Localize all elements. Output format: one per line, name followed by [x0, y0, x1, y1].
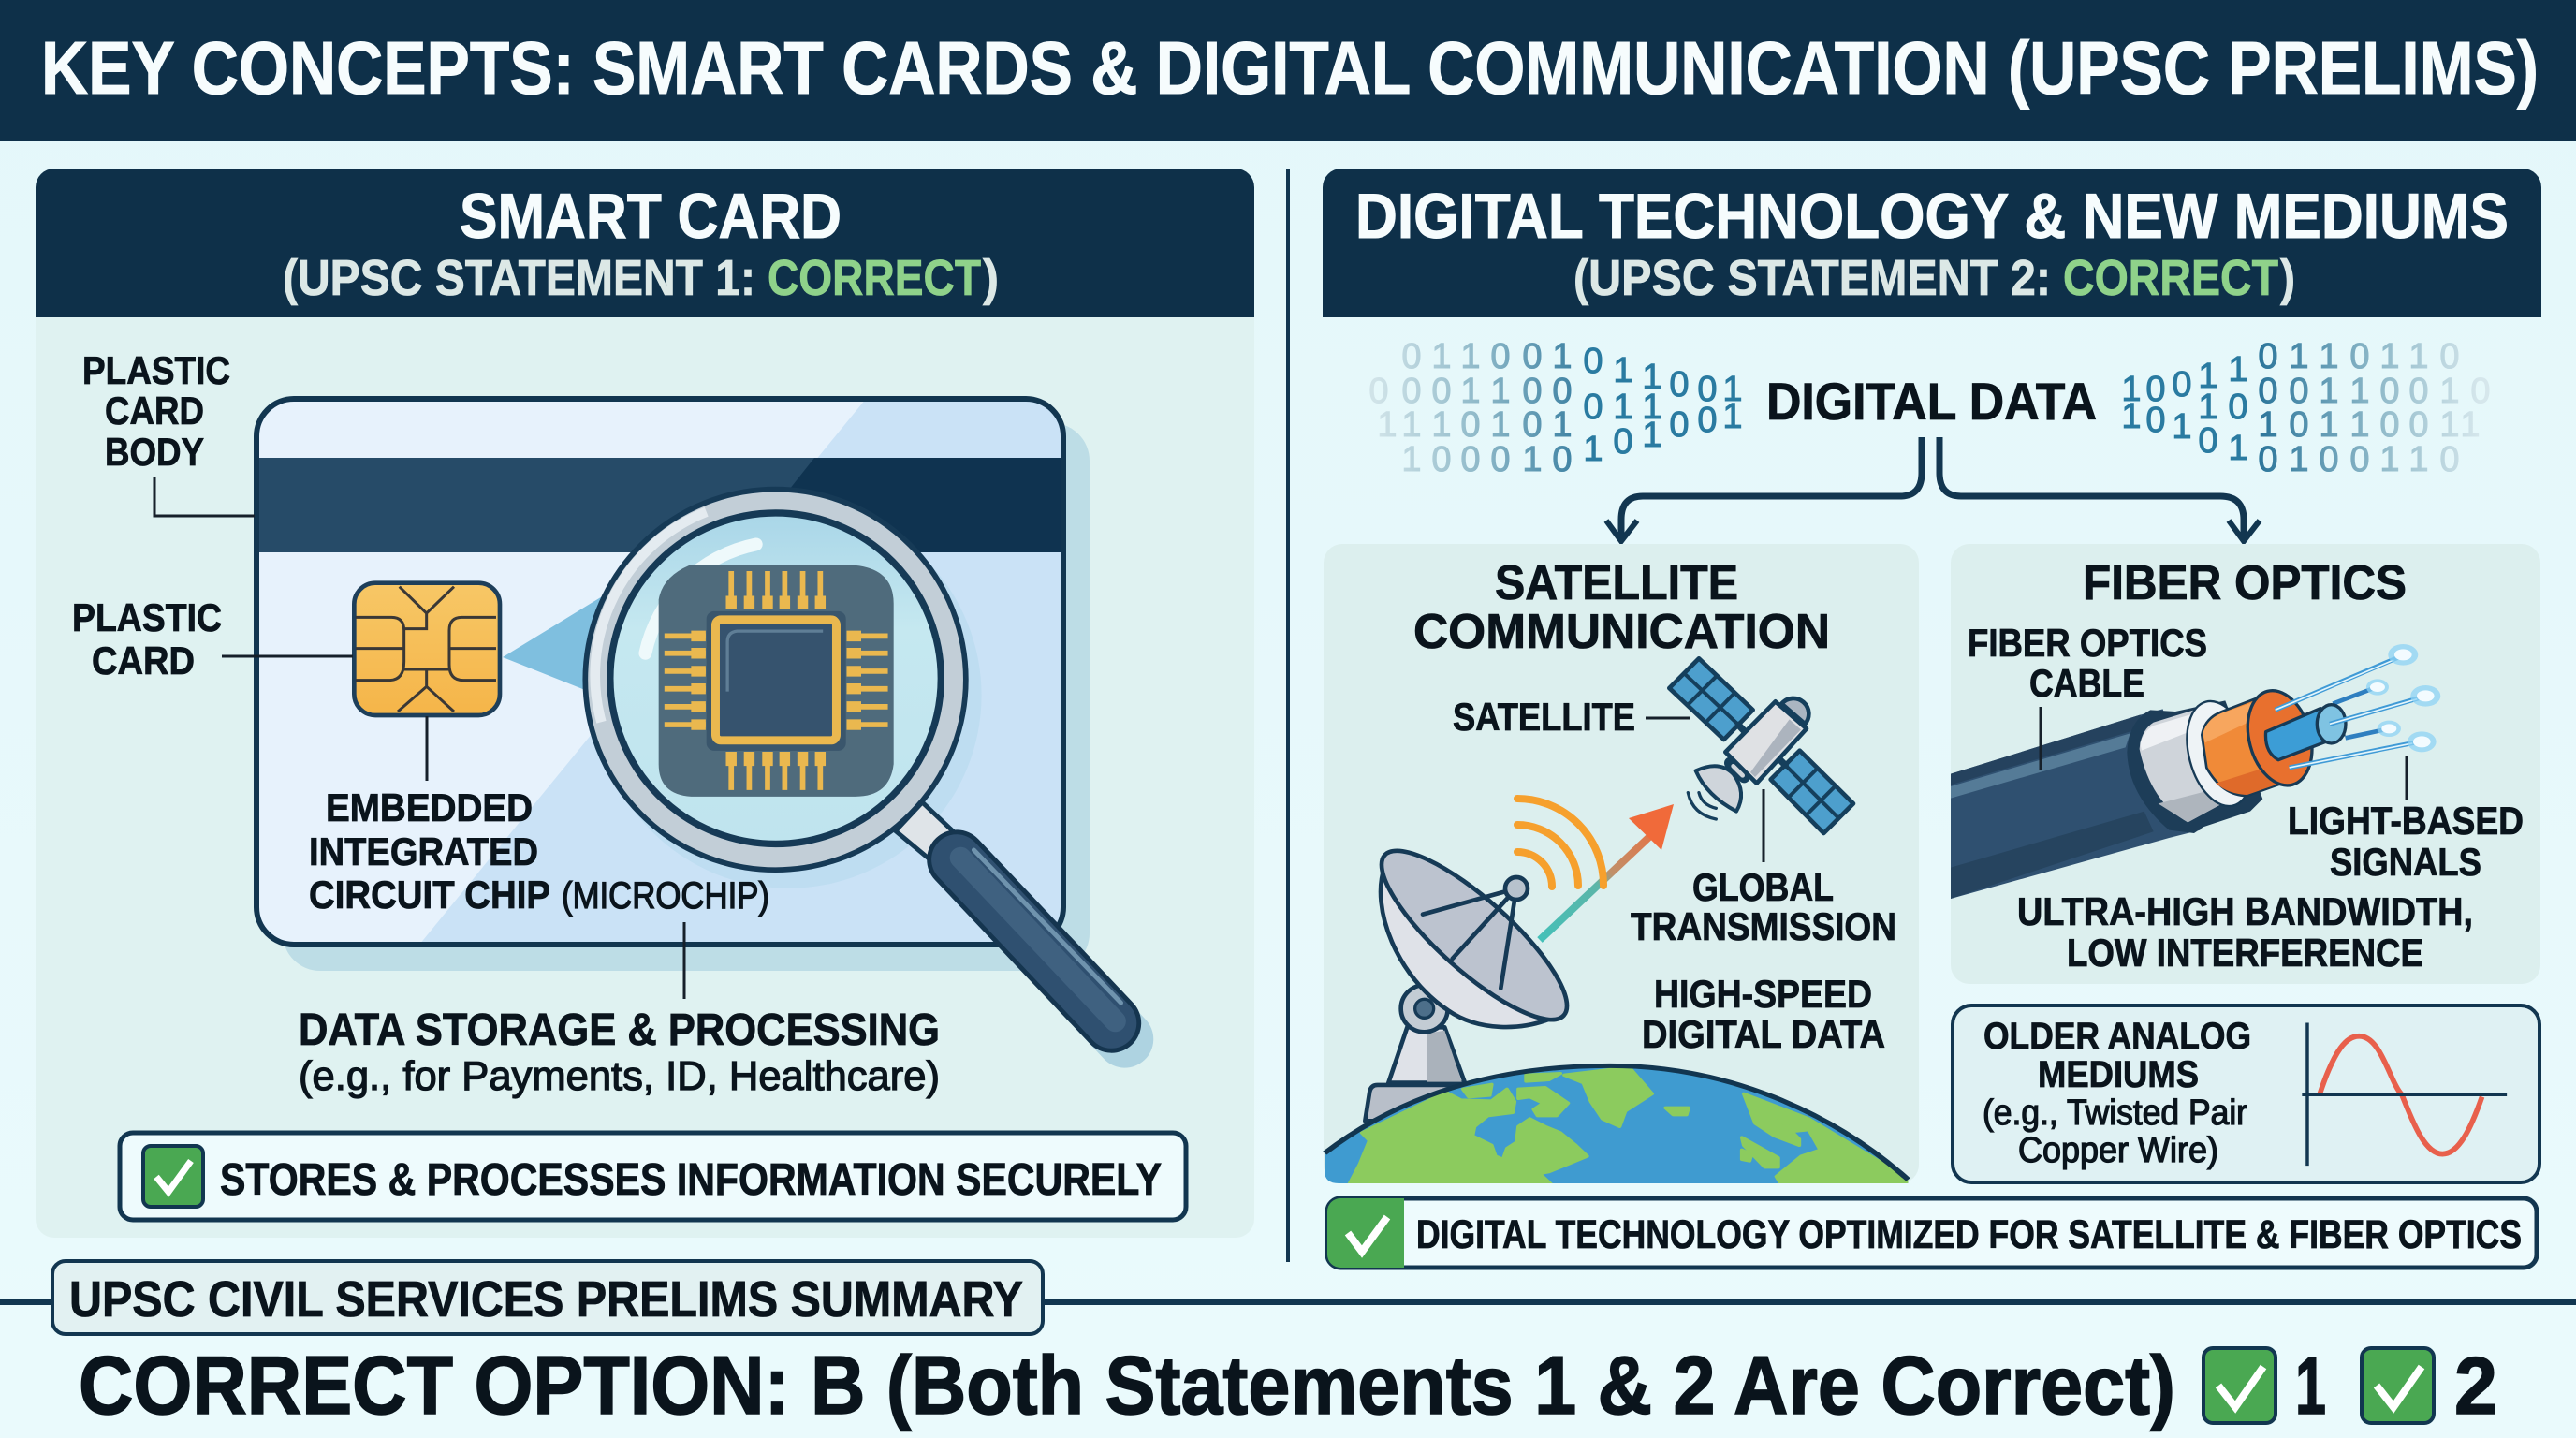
label: light-based signals: SIGNALS — [2330, 840, 2481, 884]
binary digits left: 0001100 — [1368, 372, 1573, 411]
label: plastic card body: BODY — [105, 430, 204, 474]
panel: digital technology heading: CORRECT — [2063, 250, 2278, 306]
binary digits left: 1110101 — [1377, 405, 1573, 445]
correct option answer: CORRECT OPTION: B (Both Statements 1 & 2 Are Correct) — [79, 1339, 2175, 1431]
smart card heading: SMART CARD — [460, 181, 842, 252]
smart card heading: CORRECT — [768, 250, 981, 306]
panel: digital technology heading: ) — [2280, 250, 2295, 306]
binary digits left: 1 — [1613, 351, 1633, 390]
text: bandwidth: ULTRA-HIGH BANDWIDTH, — [2017, 889, 2473, 933]
label: embedded integrated circuit chip: CIRCUIT CHIP — [309, 873, 550, 917]
panel: digital technology heading: (UPSC STATEMENT 2: — [1573, 250, 2051, 306]
label: fiber optics cable — [1968, 621, 2207, 770]
binary digits right: 1 — [2228, 350, 2248, 389]
label: data storage and processing: DATA STORAGE & PROCESSING — [299, 1005, 940, 1055]
label: plastic card body: PLASTIC — [82, 348, 230, 392]
binary digits left: 1 — [1722, 370, 1743, 409]
summary divider — [0, 1299, 2576, 1305]
label: high-speed digital data: DIGITAL DATA — [1642, 1012, 1885, 1056]
correct option answer: 1 — [2295, 1342, 2326, 1431]
label: fiber optics cable: CABLE — [2029, 661, 2144, 705]
callout: digital technology optimized — [1327, 1198, 2537, 1268]
binary digits left: 0 — [1583, 342, 1603, 381]
arrows: digital data to mediums — [1606, 437, 2260, 541]
binary digits left: 011 — [1583, 388, 1662, 427]
binary digits left — [1368, 337, 1743, 479]
binary digits right: 0100110 — [2258, 440, 2460, 479]
label: embedded integrated circuit chip: EMBEDDED — [326, 785, 533, 829]
panel: older analog mediums: Copper Wire) — [2018, 1131, 2218, 1170]
label: high-speed digital data — [1642, 972, 1885, 1056]
label: data storage and processing — [299, 922, 940, 1099]
icon: check 2 — [2362, 1348, 2434, 1423]
binary digits right: 1 — [2228, 429, 2248, 468]
label: plastic card — [72, 595, 353, 682]
binary digits right: 0 — [2145, 370, 2166, 409]
binary digits left: 1 — [1642, 416, 1662, 455]
binary digits right: 00110010 — [2258, 372, 2491, 411]
binary digits left: 1 — [1642, 358, 1662, 397]
label: plastic card: CARD — [92, 638, 195, 682]
label: satellite: SATELLITE — [1453, 695, 1635, 739]
binary digits right: 0 — [2145, 401, 2166, 440]
illustration: fiber cable — [1951, 644, 2440, 899]
text: bandwidth — [2017, 889, 2473, 975]
label: fiber optics cable: FIBER OPTICS — [1968, 621, 2207, 665]
chart: analog sine wave — [2302, 1022, 2507, 1166]
label: embedded integrated circuit chip: INTEGRATED — [309, 829, 538, 873]
illustration: earth — [1324, 1061, 1912, 1186]
binary digits right: 0 — [2198, 421, 2218, 461]
panel: smart card — [36, 169, 1254, 1238]
icon: satellite — [1669, 658, 1853, 833]
smart card heading — [36, 169, 1254, 317]
satellite heading: COMMUNICATION — [1413, 605, 1830, 659]
panel: older analog mediums — [1953, 1005, 2539, 1182]
binary digits left: 011001 — [1401, 337, 1573, 376]
panel: digital technology heading — [1323, 169, 2541, 317]
icon: sim chip — [354, 583, 500, 715]
binary digits left: 0 — [1669, 365, 1690, 404]
magnified microchip — [659, 565, 894, 797]
title banner — [0, 0, 2576, 141]
binary digits right: 1 — [2198, 357, 2218, 396]
binary digits left: 100010 — [1401, 440, 1573, 479]
satellite heading: SATELLITE — [1495, 556, 1738, 610]
binary digits left: 0 — [1669, 405, 1690, 445]
label: global transmission: TRANSMISSION — [1631, 904, 1896, 948]
binary digits right: 1 — [2121, 397, 2142, 436]
illustration: plastic card — [256, 399, 1090, 971]
label: digital data: DIGITAL DATA — [1766, 372, 2097, 431]
binary digits left: 0 — [1697, 401, 1718, 440]
satellite heading — [1413, 556, 1830, 659]
label: plastic card body — [82, 348, 255, 516]
label: light-based signals — [2288, 756, 2524, 884]
binary digits right: 10 — [2198, 388, 2248, 427]
divider — [1286, 169, 1290, 1262]
binary digits left: 0 — [1697, 370, 1718, 409]
label: embedded integrated circuit chip: (MICROCHIP) — [562, 875, 769, 917]
icon: check 1 — [2203, 1348, 2276, 1423]
panel: older analog mediums: MEDIUMS — [2038, 1054, 2199, 1095]
fiber heading: FIBER OPTICS — [2083, 556, 2407, 610]
panel: satellite communication — [1324, 544, 1919, 1186]
binary digits right — [2121, 337, 2491, 479]
binary digits left: 1 — [1583, 430, 1603, 469]
label: light-based signals: LIGHT-BASED — [2288, 799, 2524, 843]
binary digits left: 0 — [1613, 422, 1633, 462]
label: data storage and processing: (e.g., for Payments, ID, Healthcare) — [299, 1053, 940, 1099]
label: prelims summary: UPSC CIVIL SERVICES PRELIMS SUMMARY — [69, 1271, 1023, 1328]
text: bandwidth: LOW INTERFERENCE — [2067, 931, 2423, 975]
correct option answer: 2 — [2454, 1342, 2497, 1431]
icon: check tab — [1327, 1198, 1404, 1268]
label: plastic card: PLASTIC — [72, 595, 222, 639]
label: global transmission — [1631, 789, 1896, 948]
icon: magnifying glass — [585, 490, 1125, 1039]
binary digits left: 1 — [1722, 397, 1743, 436]
label: high-speed digital data: HIGH-SPEED — [1654, 972, 1872, 1016]
binary digits right: 10110011 — [2258, 405, 2481, 445]
binary digits right: 1 — [2172, 407, 2192, 447]
label: global transmission: GLOBAL — [1692, 865, 1834, 909]
callout: stores securely — [120, 1133, 1186, 1220]
panel: older analog mediums: OLDER ANALOG — [1983, 1016, 2251, 1057]
callout: stores securely: STORES & PROCESSES INFORMATION SECURELY — [220, 1155, 1162, 1205]
binary digits right: 1 — [2121, 370, 2142, 409]
smart card heading: (UPSC STATEMENT 1: — [283, 250, 755, 306]
signal beam arrow — [1517, 799, 1674, 940]
label: plastic card body: CARD — [105, 389, 204, 433]
icon: check box — [143, 1146, 203, 1207]
binary digits right: 0110110 — [2258, 337, 2460, 376]
binary digits right: 0 — [2172, 365, 2192, 404]
smart card heading: ) — [983, 250, 999, 306]
illustration: dish antenna — [1361, 829, 1588, 1121]
panel: fiber optics — [1951, 544, 2540, 984]
panel: older analog mediums: (e.g., Twisted Pair — [1983, 1093, 2247, 1133]
label: embedded integrated circuit chip — [309, 716, 769, 917]
